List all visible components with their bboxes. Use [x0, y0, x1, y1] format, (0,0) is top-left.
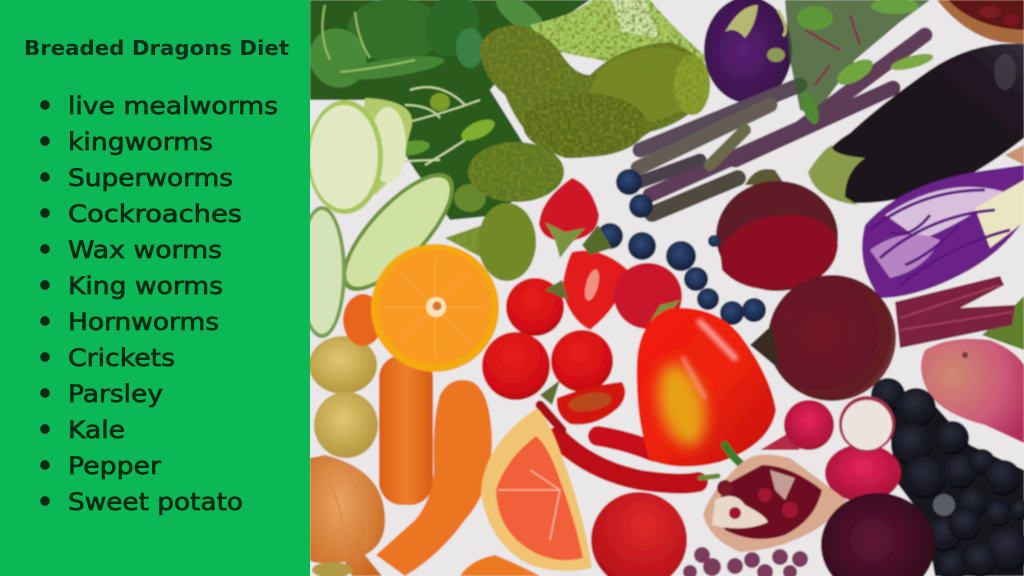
item: Sweet potato: Sweet potato	[68, 488, 243, 516]
radishes	[760, 396, 901, 502]
item: kingworms: kingworms	[68, 128, 213, 156]
broccoli: large head	[480, 0, 712, 158]
chili peppers	[540, 405, 718, 484]
zucchini slices	[307, 98, 412, 214]
pomegranate	[703, 454, 850, 552]
tomatoes	[482, 278, 625, 425]
item: Superworms: Superworms	[68, 164, 233, 192]
kohlrabi	[704, 0, 792, 103]
bullet list	[40, 92, 278, 516]
onion	[310, 455, 385, 576]
bell pepper	[637, 308, 776, 480]
red onion	[821, 493, 935, 576]
bowl of beans	[937, 0, 1024, 44]
eggplant	[808, 44, 1024, 205]
whole beet with stems	[750, 275, 1024, 401]
potatoes	[309, 336, 378, 458]
item: Wax worms: Wax worms	[68, 236, 222, 264]
item: Kale: Kale	[68, 416, 125, 444]
dark grapes	[871, 378, 1024, 576]
panel: green sidebar	[0, 0, 310, 576]
sweet potato	[921, 339, 1024, 443]
cut beet	[716, 169, 838, 291]
small orange vegetable	[343, 294, 383, 346]
item: Hornworms: Hornworms	[68, 308, 219, 336]
red cabbage	[862, 145, 1024, 298]
photo: assorted vegetables and fruit	[310, 0, 1024, 576]
marble background	[310, 0, 1024, 576]
item: King worms: King worms	[68, 272, 223, 300]
carrots	[376, 355, 492, 576]
strawberries	[539, 178, 682, 330]
item: Kale	[40, 416, 125, 444]
nectarine	[591, 492, 687, 576]
leafy greens	[299, 0, 590, 220]
cucumber slices	[298, 157, 471, 338]
orange slice	[371, 244, 499, 372]
asparagus bundle	[638, 35, 925, 214]
heading: Breaded Dragons Diet	[24, 36, 289, 60]
blueberries	[597, 169, 766, 325]
small purple grapes	[683, 547, 808, 576]
broccoli: small heads	[445, 142, 564, 281]
item: Cockroaches: Cockroaches	[68, 200, 242, 228]
item: Pepper: Pepper	[68, 452, 161, 480]
item: Crickets: Crickets	[68, 344, 175, 372]
orange vegetable at bottom edge	[460, 555, 540, 576]
grapefruit wedge	[481, 408, 592, 571]
item: Pepper	[40, 452, 161, 480]
item: live mealworms: live mealworms	[68, 92, 278, 120]
microgreen leaves over asparagus	[785, 0, 935, 126]
item: Parsley: Parsley	[68, 380, 163, 408]
microgreens	[395, 87, 480, 165]
